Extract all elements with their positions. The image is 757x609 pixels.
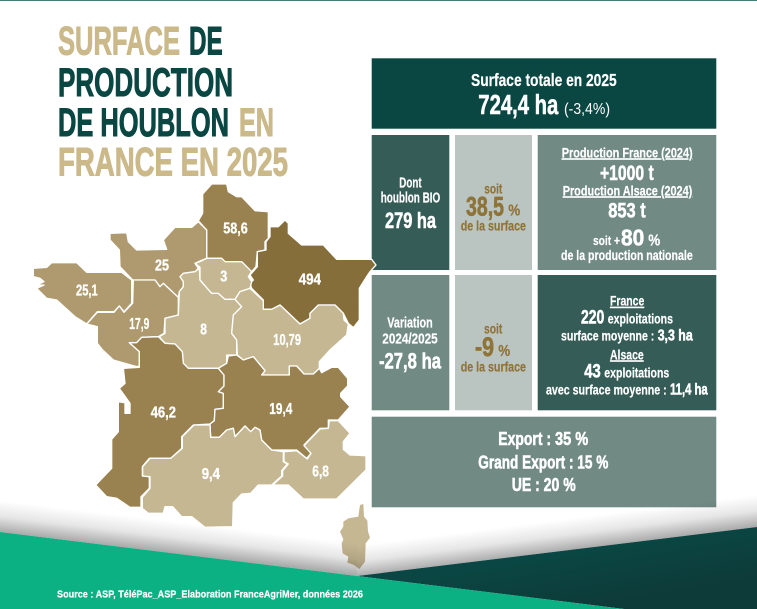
panel: exploitations: exploitations — [608, 310, 673, 326]
panel: production: de la production nationale — [561, 247, 693, 263]
map value labels: 58,6 — [223, 220, 248, 237]
panel: production: +1000 t — [600, 162, 654, 185]
panel: variation: -27,8 ha — [379, 348, 442, 373]
panel: exploitations: 3,3 ha — [658, 328, 693, 345]
region: Bourgogne-Franche-Comte — [232, 288, 348, 375]
footer shadow — [0, 495, 757, 576]
panel: surface totale: Surface totale en 2025 — [471, 70, 617, 90]
panel: variation: Variation — [387, 315, 433, 331]
panel: houblon bio — [372, 135, 449, 270]
panel: exploitations: avec surface moyenne : — [546, 381, 667, 397]
map value labels: 9,4 — [202, 466, 220, 483]
region: Nouvelle-Aquitaine — [96, 337, 224, 507]
region: Hauts-de-France — [198, 184, 268, 272]
panel: production: 853 t — [608, 200, 646, 223]
region: Provence-Alpes-Cote d'Azur — [273, 421, 366, 499]
region: Auvergne-Rhone-Alpes — [210, 355, 350, 458]
map of France by region — [33, 184, 376, 569]
panel: part variation — [455, 275, 532, 410]
panel: surface totale: (-3,4%) — [564, 101, 610, 118]
panel: part variation: % — [498, 343, 510, 360]
title: DE HOUBLON — [58, 101, 229, 145]
panel: export: UE : 20 % — [512, 475, 576, 495]
title: PRODUCTION — [58, 61, 233, 105]
panel: houblon bio: Dont — [399, 176, 422, 192]
map value labels: 10,79 — [273, 332, 301, 349]
region: Ile-de-France — [195, 258, 252, 299]
panel: export: Export : — [498, 429, 551, 449]
region: Corse — [340, 504, 370, 569]
panel: exploitations: 11,4 ha — [670, 381, 708, 398]
title — [58, 19, 288, 185]
panel: variation: 2024/2025 — [382, 331, 438, 347]
panel: production: % — [648, 233, 660, 250]
panel: surface totale — [372, 58, 716, 129]
panel: houblon bio: houblon BIO — [381, 191, 440, 207]
panel: part bio — [455, 135, 532, 270]
panel: production: soit + — [593, 233, 620, 248]
source note: Source : ASP, TéléPac_ASP_Elaboration FranceAgriMer, données 2026 — [57, 588, 363, 600]
panel: variation — [372, 275, 449, 410]
panel: part bio: de la surface — [461, 218, 526, 234]
title: FRANCE EN 2025 — [58, 141, 288, 185]
map value labels: 46,2 — [151, 404, 176, 421]
panel: production: Production France (2024) — [562, 144, 693, 160]
map value labels: 19,4 — [269, 401, 293, 418]
panel: part variation: soit — [484, 320, 503, 336]
map value labels: 25 — [155, 258, 169, 275]
map value labels: 8 — [200, 321, 207, 338]
panel: exploitations: France — [610, 293, 644, 309]
title: DE — [189, 19, 223, 63]
map value labels — [76, 220, 329, 483]
panel: part bio: % — [508, 203, 520, 220]
panel: exploitations: exploitations — [604, 364, 669, 380]
panel: exploitations: surface moyenne : — [561, 328, 654, 344]
panel: export: Grand Export : 15 % — [478, 452, 608, 472]
map value labels: 494 — [299, 271, 321, 288]
panel: surface totale: 724,4 ha — [478, 89, 559, 120]
region: Bretagne — [33, 263, 132, 324]
panel: part variation: de la surface — [461, 359, 526, 375]
map value labels: 3 — [220, 269, 228, 286]
footer green band — [0, 532, 624, 609]
region: Occitanie — [142, 425, 287, 527]
map value labels: 25,1 — [76, 283, 98, 300]
panel: part bio: 38,5 — [466, 192, 504, 222]
region: Grand Est — [250, 220, 376, 328]
panel: production — [538, 135, 716, 270]
region: Normandie — [110, 222, 207, 297]
panel: exploitations: Alsace — [610, 346, 644, 362]
map value labels: 17,9 — [129, 316, 150, 333]
panel: part variation: -9 — [475, 332, 494, 362]
panel: exploitations: 43 — [584, 361, 601, 382]
region: Pays de la Loire — [87, 280, 178, 367]
footer dark band — [357, 527, 757, 609]
panel: exploitations: 220 — [581, 307, 604, 328]
title: SURFACE — [58, 19, 180, 63]
panel: houblon bio: 279 ha — [385, 208, 437, 233]
panel: production: Production Alsace (2024) — [563, 182, 692, 198]
panel: production: 80 — [621, 225, 644, 251]
region: Centre-Val de Loire — [159, 268, 242, 368]
panel: exploitations — [538, 275, 716, 410]
panel: part bio: soit — [484, 180, 503, 196]
panel: export — [372, 417, 716, 507]
panel: export: 35 % — [555, 429, 588, 449]
map value labels: 6,8 — [312, 464, 329, 481]
title: EN — [239, 101, 274, 145]
